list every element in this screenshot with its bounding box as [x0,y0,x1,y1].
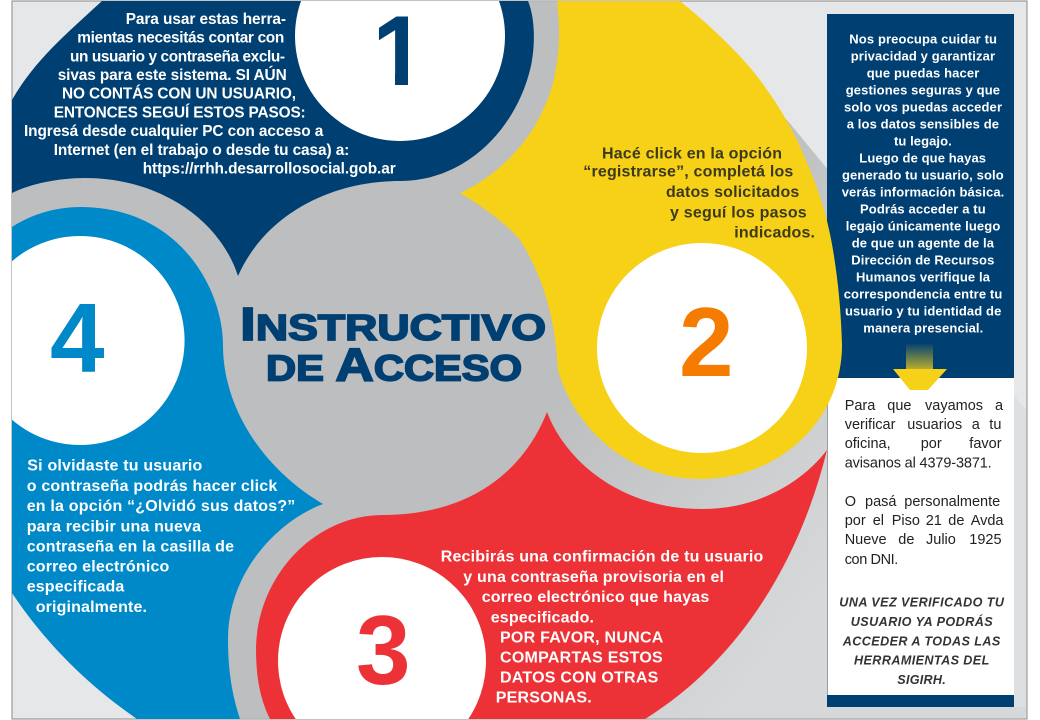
circle: step 3 [278,557,486,719]
navy footer bar [827,695,1014,707]
arrow: down to contact box [893,343,947,390]
text: step 3: COMPARTAS ESTOS [500,649,663,666]
text: step 3: DATOS CON OTRAS [500,670,659,687]
text: contact details: favor [969,436,1002,452]
text: verified note: SIGIRH. [897,673,946,687]
text: privacy note: gestiones seguras y que [846,82,1000,97]
text: privacy note: Dirección de Recursos [851,253,994,268]
text: privacy note: Podrás acceder a tu [860,202,986,217]
text: verified note: ACCEDER A TODAS LAS [842,634,1001,648]
text: step 3: correo electrónico que hayas [482,589,709,606]
circle: step 4 [12,236,185,445]
text: privacy note: verás información básica. [842,185,1004,200]
text: contact details [845,398,1004,568]
text: step 1: Internet (en el trabajo o desde tu casa) a: [54,142,349,159]
text: contact details: a [972,417,981,433]
text: step 4 [27,458,295,616]
text: step 3: POR FAVOR, NUNCA [500,629,664,646]
text: contact details: vayamos [925,398,983,414]
text: privacy note: solo vos puedas acceder [844,99,1002,114]
text: privacy note: que puedas hacer [867,65,979,80]
text: step 1: Para usar estas herra- [126,11,286,28]
text: privacy note: correspondencia entre tu [844,287,1002,302]
number 2: 2 [679,287,734,397]
text: step 3: PERSONAS. [496,690,592,707]
text: step 4: o contraseña podrás hacer click [27,478,277,495]
text: step 3: Recibirás una confirmación de tu usuario [441,549,764,566]
text: contact details: usuarios [907,417,962,433]
text: contact details: de [948,513,964,529]
text: contact details: personalmente [904,494,1000,510]
circle: step 2 [597,243,807,453]
number 4: 4 [50,283,105,393]
text: privacy note: Luego de que hayas [859,150,986,165]
text: verified note [839,596,1005,687]
panel: privacy navy box [827,14,1014,378]
text: contact details: con DNI. [845,552,898,568]
panel: contact white box [827,378,1014,707]
text: privacy note: tu legajo. [894,133,952,148]
title: DE ACCESO [266,339,522,391]
text: contact details: por [921,436,942,452]
text: step 3 [441,549,764,707]
text: privacy note: manera presencial. [863,321,983,336]
text: contact details: Nueve [845,532,887,548]
number 3: 3 [356,595,411,705]
text: step 2 [583,145,815,241]
text: privacy note: legajo únicamente luego [846,219,1000,234]
text: contact details: verificar [845,417,896,433]
text: privacy note: generado tu usuario, solo [842,168,1004,183]
text: step 3: y una contraseña provisoria en el [463,569,724,586]
text: step 4: correo electrónico [27,559,170,576]
panel: step 4 blue [12,207,323,719]
text: step 4: para recibir una nueva [27,518,201,535]
text: contact details: tu [989,417,1001,433]
text: step 1: un usuario y contraseña exclu- [70,48,285,65]
text: verified note: UNA VEZ VERIFICADO TU [839,596,1005,610]
text: verified note: HERRAMIENTAS DEL [854,654,989,668]
circle: step 1 [295,1,505,141]
text: contact details: a [995,398,1004,414]
text: contact details: avisanos al 4379-3871. [845,456,992,472]
text: contact details: de [898,532,914,548]
text: step 4: especificada [27,579,124,596]
text: privacy note: de que un agente de la [852,236,995,251]
text: step 2: “registrarse”, completá los [583,164,793,181]
text: step 2: y seguí los pasos [670,204,807,221]
text: step 1 [24,11,396,178]
text: privacy note: Humanos verifique la [856,270,991,285]
text: step 1: mientas necesitás contar con [77,30,284,47]
text: step 2: indicados. [734,224,815,241]
text: privacy note: usuario y tu identidad de [845,304,1001,319]
text: contact details: 1925 [969,532,1002,548]
text: contact details: Julio [926,532,956,548]
text: privacy note: a los datos sensibles de [847,116,999,131]
text: contact details: O [845,494,856,510]
text: step 1: sivas para este sistema. SI AÚN [58,66,287,84]
text: step 1: https://rrhh.desarrollosocial.gob.ar [143,161,396,178]
title [240,298,546,391]
text: contact details: 21 [926,513,942,529]
panel: step 2 yellow [460,1,842,479]
text: privacy note: privacidad y garantizar [851,48,995,63]
text: contact details: oficina, [845,436,891,452]
text: step 4: originalmente. [36,599,147,616]
panel: step 3 red [256,412,827,719]
text: privacy note [842,31,1004,336]
text: contact details: pasá [865,494,897,510]
text: step 2: datos solicitados [666,184,799,201]
text: contact details: el [873,513,884,529]
text: contact details: Para [845,398,876,414]
text: privacy note: Nos preocupa cuidar tu [849,31,997,46]
text: step 1: Ingresá desde cualquier PC con acceso a [24,123,324,140]
text: contact details: Avda [971,513,1004,529]
text: contact details: que [887,398,912,414]
text: step 1: NO CONTÁS CON UN USUARIO, [62,86,296,103]
text: verified note: USUARIO YA PODRÁS [851,614,993,629]
text: contact details: Piso [892,513,920,529]
text: step 4: contraseña en la casilla de [27,538,234,555]
text: step 4: en la opción “¿Olvidó sus datos?” [27,498,295,515]
text: step 3: especificado. [491,609,594,626]
text: contact details: por [845,513,866,529]
text: step 4: Si olvidaste tu usuario [27,458,203,475]
right shadow strip [1014,395,1026,707]
panel: step 1 navy [12,0,534,276]
title: INSTRUCTIVO [240,298,546,350]
text: step 2: Hacé click en la opción [602,145,782,162]
text: step 1: ENTONCES SEGUÍ ESTOS PASOS: [54,104,306,121]
